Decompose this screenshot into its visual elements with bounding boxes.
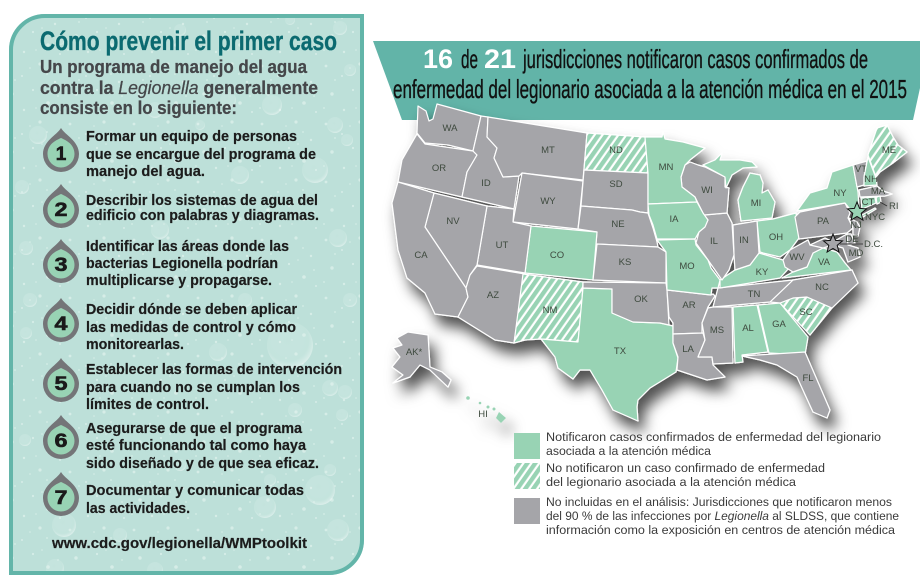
state: OK: OK [634, 294, 649, 305]
state: TN: TN [748, 289, 760, 300]
step 6 text [86, 421, 319, 472]
banner headline text: 16 [423, 44, 453, 74]
icon: drop 7: 7 [54, 488, 68, 509]
icon: drop 2 [43, 184, 79, 228]
state: UT: UT [496, 240, 509, 251]
state: GA [758, 303, 808, 355]
state: SD: SD [609, 179, 623, 190]
state: AZ [458, 266, 525, 343]
state: KS: KS [619, 257, 631, 268]
state: OH: OH [769, 232, 783, 243]
state: WV: WV [789, 252, 805, 263]
step 4 text [86, 302, 297, 353]
state: UT [477, 206, 531, 273]
step 3 text: bacterias Legionella podrían [86, 256, 278, 272]
step 6 text: sido diseñado y de que sea eficaz. [86, 456, 319, 472]
step 5 text [86, 362, 342, 413]
icon: drop 6: 6 [54, 431, 68, 452]
step 7 [43, 472, 304, 517]
state: MA: MA [871, 186, 886, 197]
state: WV [783, 240, 823, 272]
panel intro text: Un programa de manejo del agua [40, 56, 308, 77]
panel intro text: contra la Legionella generalmente [40, 77, 318, 98]
icon: star NYC [848, 202, 866, 220]
state: NV: NV [446, 216, 460, 227]
state: SC [780, 297, 832, 335]
step 1 text: manejo del agua. [86, 164, 205, 180]
legend: reported confirmed cases: asociada a la atención médica [546, 444, 711, 458]
state: ID: ID [481, 178, 491, 189]
step 2 text: Describir los sistemas de agua del [86, 193, 318, 209]
state: RI [876, 196, 881, 204]
state: IL [696, 213, 734, 280]
state: MD: MD [849, 248, 864, 259]
legend: not included in the analysis: del 90 % de las infecciones por Legionella al SLDSS, que contiene [546, 509, 899, 523]
state: AR: AR [682, 300, 696, 311]
label RI: RI [889, 201, 898, 212]
state: LA: LA [682, 344, 694, 355]
step 4 text: monitorearlas. [86, 337, 184, 353]
banner shape [373, 41, 920, 120]
panel border [11, 16, 362, 573]
step 5 [43, 358, 342, 413]
state: WA: WA [443, 123, 458, 134]
step 5 text: para cuando no se cumplan los [86, 380, 300, 396]
legend: not included in the analysis: información como la exposición en centros de atención médica [546, 523, 895, 537]
state: NH: NH [864, 174, 878, 185]
state: MN [645, 132, 705, 204]
state: WI: WI [701, 185, 713, 196]
legend: did not report a confirmed case: del legionario asociada a la atención médica [546, 475, 796, 489]
state: NV [425, 193, 487, 288]
state: NY: NY [833, 188, 847, 199]
icon: drop 3: 3 [54, 255, 68, 276]
state: CO [525, 226, 597, 280]
state: NC: NC [815, 282, 829, 293]
RI leader line [880, 202, 887, 206]
state: CT: CT [862, 197, 875, 208]
legend: not included in the analysis: No incluidas en el análisis: Jurisdicciones que notificaron menos [546, 495, 892, 509]
panel title: Cómo prevenir el primer caso [40, 26, 337, 56]
legend: did not report a confirmed case: No notificaron un caso confirmado de enfermedad [546, 461, 825, 475]
label D.C.: D.C. [864, 239, 883, 250]
state: TX [541, 288, 678, 421]
state: IA: IA [670, 214, 679, 225]
state: NE: NE [611, 219, 625, 230]
state: FL: FL [802, 373, 814, 384]
banner: headline [373, 41, 920, 120]
step 7 text: las actividades. [86, 501, 190, 517]
state: HI: HI [478, 409, 488, 420]
state: NC [770, 270, 858, 308]
icon: drop 7 [43, 472, 79, 516]
state: OR: OR [432, 163, 446, 174]
state: AK [392, 332, 451, 387]
state: MT: MT [541, 145, 555, 156]
state: DE: DE [845, 234, 859, 245]
state: WY [513, 173, 583, 229]
state: TX: TX [614, 346, 627, 357]
state: GA: GA [772, 319, 787, 330]
icon: drop 6 [43, 415, 79, 459]
state: VT: VT [855, 164, 867, 175]
icon: drop 3 [43, 239, 79, 283]
state: AZ: AZ [487, 290, 499, 301]
state: VA: VA [818, 257, 831, 268]
step 6 text: esté funcionando tal como haya [86, 438, 307, 454]
icon: drop 1: 1 [56, 144, 67, 165]
state: NM: NM [543, 305, 557, 316]
state: OH [757, 213, 799, 257]
step 4 text: las medidas de control y cómo [86, 320, 296, 336]
website URL: www.cdc.gov/legionella/WMPtoolkit [51, 536, 307, 552]
D.C. leader line [840, 243, 863, 245]
step 5 text: límites de control. [86, 397, 209, 413]
step 1 text [86, 129, 316, 180]
state: CA [392, 182, 468, 317]
state: ND [584, 133, 648, 173]
state: MO [657, 239, 720, 295]
state: KY: KY [756, 267, 769, 278]
step 1 text: Formar un equipo de personas [86, 129, 297, 145]
state: MI: MI [751, 198, 761, 209]
step 3 text: multiplicarse y propagarse. [86, 273, 272, 289]
state: AL: AL [742, 323, 754, 334]
state: NE [578, 206, 658, 247]
label NYC: NYC [865, 212, 885, 223]
state: MS [698, 307, 733, 364]
state: MT [487, 117, 587, 180]
legend: reported confirmed cases: Notificaron casos confirmados de enfermedad del legionario [546, 430, 881, 444]
state: NM [514, 274, 583, 343]
state: CA: CA [414, 250, 428, 261]
step 5 text: Establecer las formas de intervención [86, 362, 342, 378]
state: NJ [849, 218, 862, 236]
step 6 text: Asegurarse de que el programa [86, 421, 303, 437]
icon: drop 1 [43, 128, 79, 172]
state: FL [742, 352, 830, 418]
legend [514, 430, 899, 537]
banner headline text: de [461, 44, 478, 74]
step 7 text: Documentar y comunicar todas [86, 483, 304, 499]
state: NY [797, 165, 859, 213]
state: MO: MO [679, 261, 695, 272]
state: CO: CO [550, 250, 564, 261]
state: KS [593, 244, 666, 283]
state: ME: ME [882, 145, 896, 156]
state: Long Island [862, 208, 876, 217]
icon: drop 5: 5 [54, 374, 68, 395]
state: WA [417, 104, 481, 151]
state: PA [795, 203, 853, 239]
step 3 text: Identificar las áreas donde las [86, 239, 289, 255]
state: VA [782, 248, 851, 278]
state: AK: AK* [406, 347, 422, 358]
state: PA: PA [817, 216, 830, 227]
state: ND: ND [609, 145, 623, 156]
panel intro text [40, 56, 318, 118]
step 1 text: que se encargue del programa de [86, 147, 316, 163]
panel: how to prevent the first case [9, 14, 364, 578]
state: MN: MN [659, 162, 674, 173]
state: MD [810, 234, 864, 262]
panel intro text: consiste en lo siguiente: [40, 97, 237, 118]
state: IL: IL [710, 236, 718, 247]
state: KY [720, 253, 790, 288]
state: OR [398, 134, 477, 197]
state: IA [648, 202, 708, 239]
state: AL [733, 305, 768, 363]
state: SC: SC [799, 307, 813, 318]
icon: drop 4 [43, 298, 79, 342]
state: VT [853, 161, 867, 187]
icon: drop 2: 2 [54, 200, 68, 221]
step 4 text: Decidir dónde se deben aplicar [86, 302, 297, 318]
state: MI [703, 153, 775, 221]
banner headline text [393, 44, 907, 104]
icon: drop 4: 4 [54, 314, 68, 335]
step 7 text [86, 483, 304, 517]
state: OK [583, 282, 669, 325]
state: NJ: NJ [850, 220, 862, 231]
state: ME [868, 125, 907, 177]
map: United States by reporting status [392, 104, 907, 423]
state: AR [667, 290, 715, 334]
legend: not included in the analysis [514, 495, 899, 537]
step 6 [43, 415, 319, 472]
icon: star D.C. [824, 234, 842, 252]
callouts: NYC, D.C. and RI markers [824, 201, 898, 252]
step 3 text [86, 239, 289, 289]
state: TN [713, 280, 793, 307]
icon: drop 5 [43, 358, 79, 402]
legend: reported confirmed cases [514, 430, 881, 459]
step 2 text [86, 193, 319, 224]
step 3 [43, 239, 289, 289]
state: NH [864, 157, 878, 186]
state: SD [581, 170, 648, 213]
state: HI [466, 396, 506, 423]
state: MA [859, 186, 892, 197]
legend: did not report a confirmed case [514, 461, 825, 489]
banner headline text: 21 [484, 44, 516, 74]
state: LA [673, 333, 725, 380]
panel background with water droplets [9, 14, 364, 578]
state: WI [681, 162, 729, 215]
state: ID [462, 116, 519, 209]
state: IN [733, 221, 759, 270]
state: IN: IN [739, 235, 749, 246]
state: WY: WY [540, 196, 556, 207]
step 2 [43, 184, 319, 228]
step 2 text: edificio con palabras y diagramas. [86, 208, 319, 224]
state: MS: MS [710, 325, 724, 336]
step 4 [43, 298, 297, 353]
step 1 [43, 128, 316, 180]
